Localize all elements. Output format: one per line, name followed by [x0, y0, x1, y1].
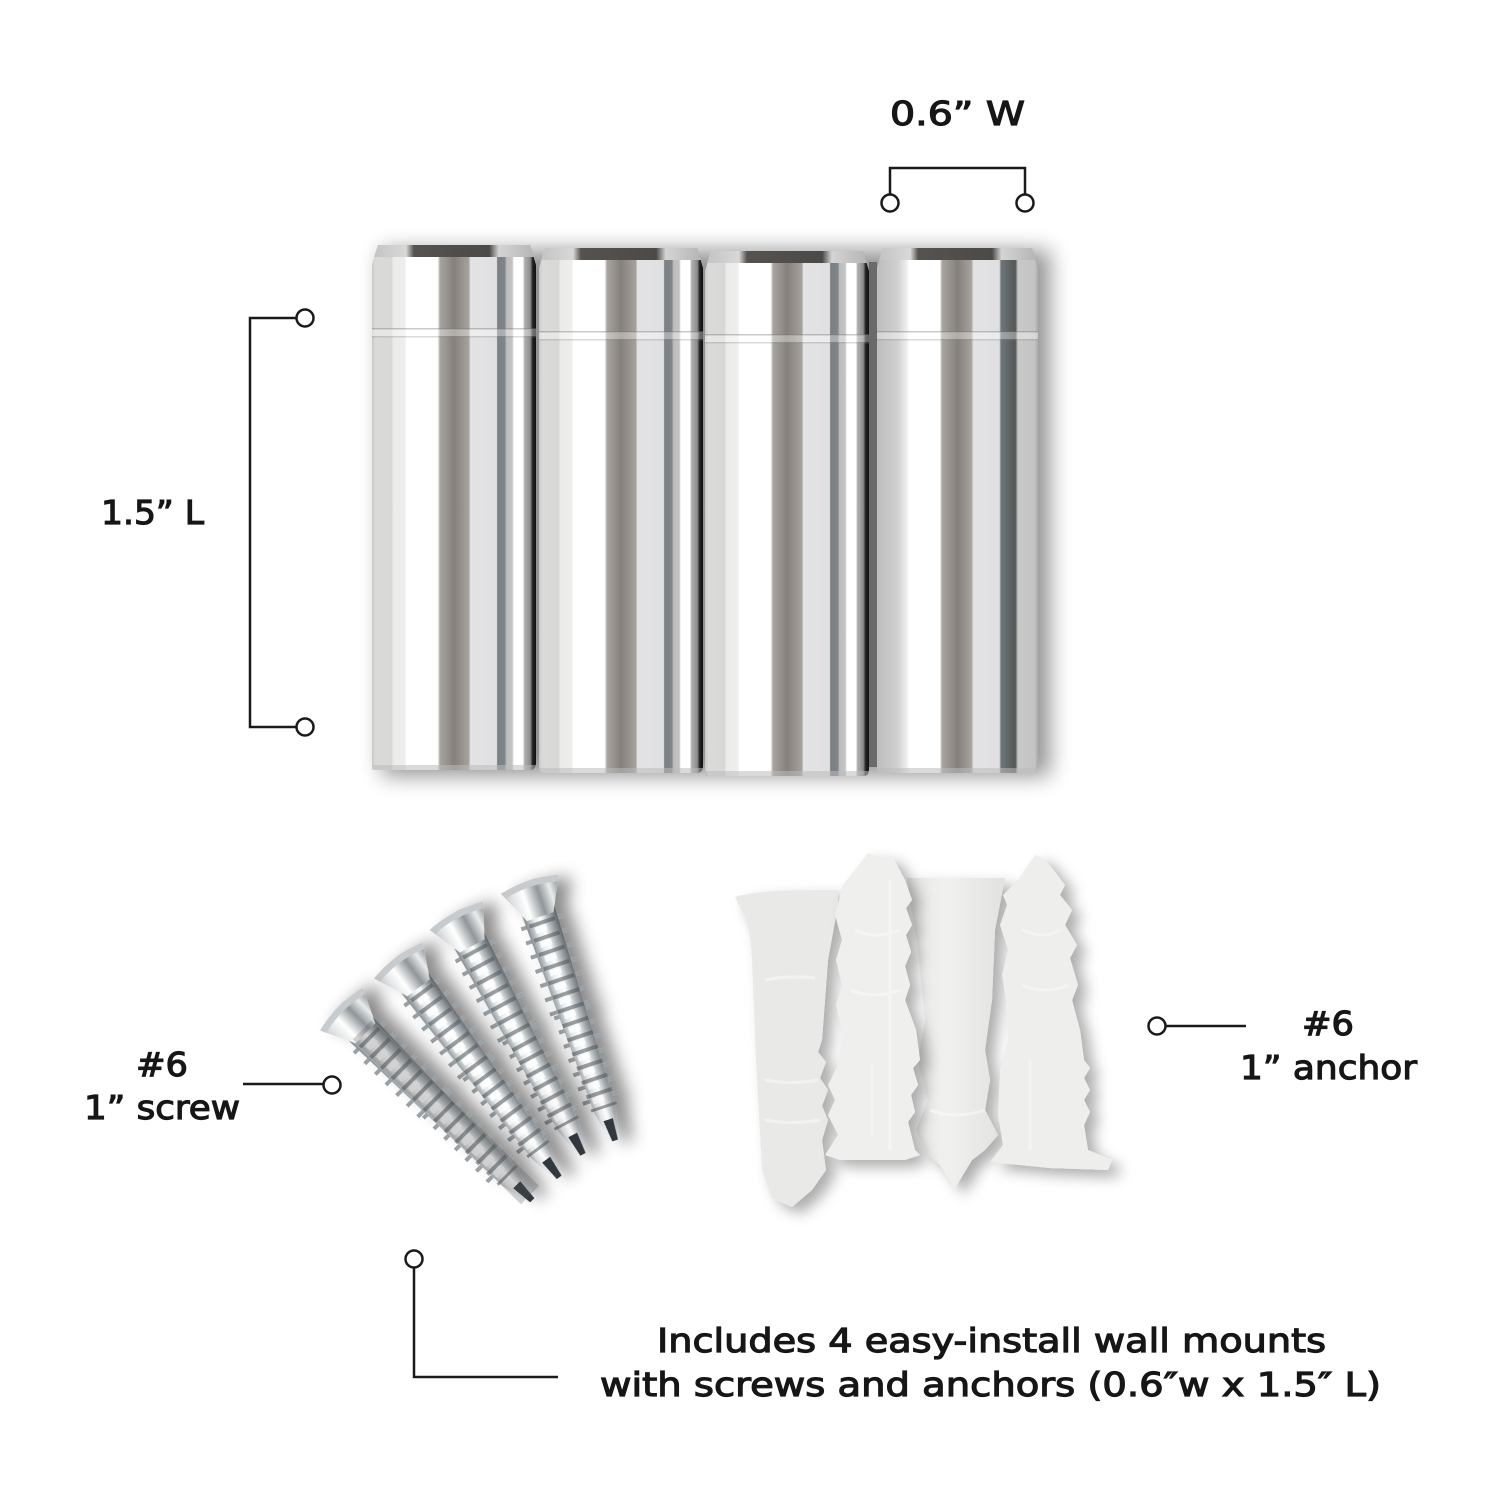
includes description	[600, 1321, 1381, 1404]
anchor callout line	[1148, 1018, 1246, 1034]
anchor 4	[990, 855, 1112, 1170]
includes description: Includes 4 easy-install wall mounts	[657, 1321, 1326, 1360]
width dimension bracket	[882, 168, 1034, 212]
length dimension bracket	[250, 310, 314, 736]
anchor label: #6	[1302, 1004, 1354, 1043]
anchor 2	[825, 853, 920, 1160]
includes description: with screws and anchors (0.6″w x 1.5″ L)	[600, 1365, 1381, 1404]
width label: 0.6” W	[890, 94, 1025, 133]
anchor 1	[735, 890, 838, 1207]
screw label: #6	[136, 1045, 188, 1084]
screw label	[84, 1045, 240, 1127]
length label: 1.5” L	[101, 493, 205, 532]
plastic wall anchors	[735, 853, 1112, 1207]
includes callout line	[406, 1250, 558, 1377]
screw label: 1” screw	[84, 1088, 240, 1127]
anchor label	[1240, 1004, 1417, 1087]
screw callout line	[243, 1076, 340, 1094]
screws	[317, 871, 644, 1221]
wall mount standoff cylinders	[372, 245, 1050, 776]
anchor 3	[907, 878, 1005, 1188]
anchor label: 1” anchor	[1240, 1048, 1417, 1087]
